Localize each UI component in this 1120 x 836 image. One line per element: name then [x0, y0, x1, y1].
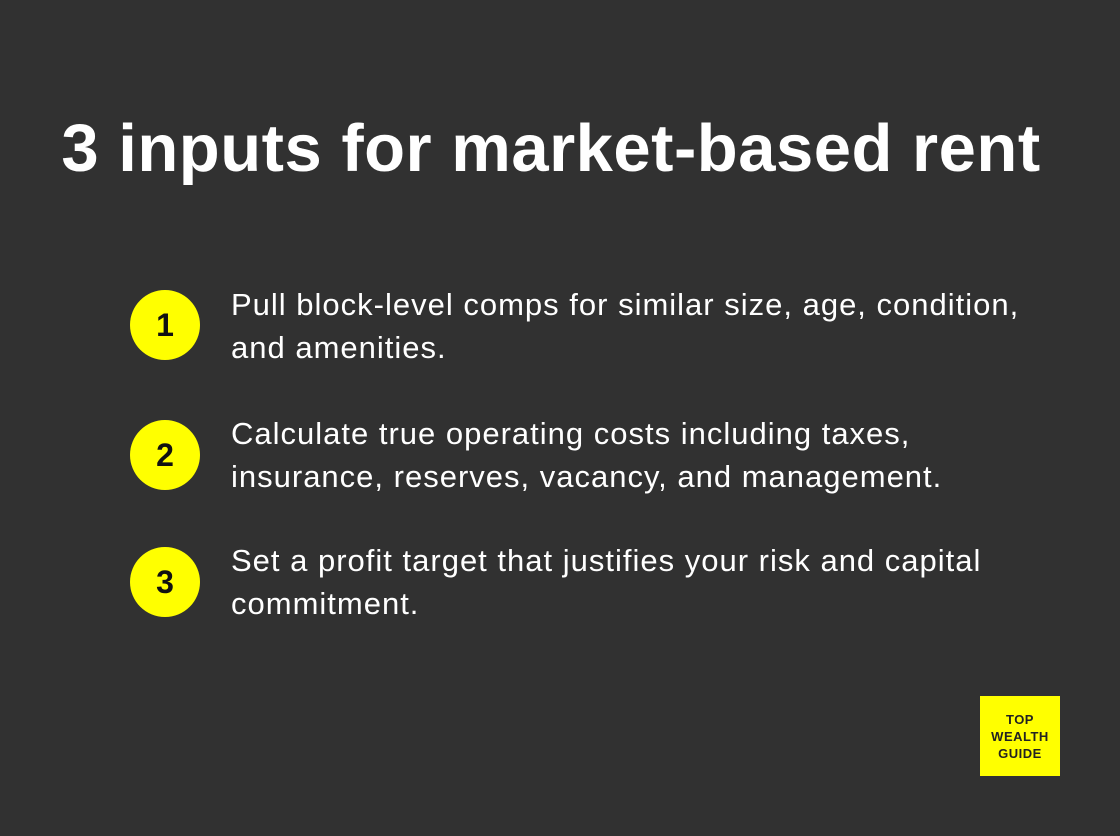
logo: [980, 696, 1060, 776]
text 2: Calculate true operating costs including taxes,: [231, 416, 910, 451]
text 3: commitment.: [231, 586, 419, 621]
number badge 1: 1: [156, 307, 174, 343]
text 2: [231, 416, 942, 494]
text 2: insurance, reserves, vacancy, and management.: [231, 459, 942, 494]
logo: TOP: [1006, 712, 1034, 726]
number badge 1: [130, 290, 200, 360]
text 1: Pull block-level comps for similar size, age, condition,: [231, 287, 1019, 322]
title: 3 inputs for market-based rent: [61, 111, 1041, 186]
text 3: Set a profit target that justifies your risk and capital: [231, 543, 981, 578]
number badge 2: [130, 420, 200, 490]
text 3: [231, 543, 981, 621]
item 1: [130, 287, 1019, 365]
number badge 3: 3: [156, 564, 174, 600]
item 3: [130, 543, 981, 621]
logo: WEALTH: [991, 728, 1049, 744]
item 2: [130, 416, 942, 494]
text 1: [231, 287, 1019, 365]
logo: GUIDE: [998, 746, 1042, 760]
number badge 2: 2: [156, 437, 174, 473]
text 1: and amenities.: [231, 330, 447, 365]
number badge 3: [130, 547, 200, 617]
